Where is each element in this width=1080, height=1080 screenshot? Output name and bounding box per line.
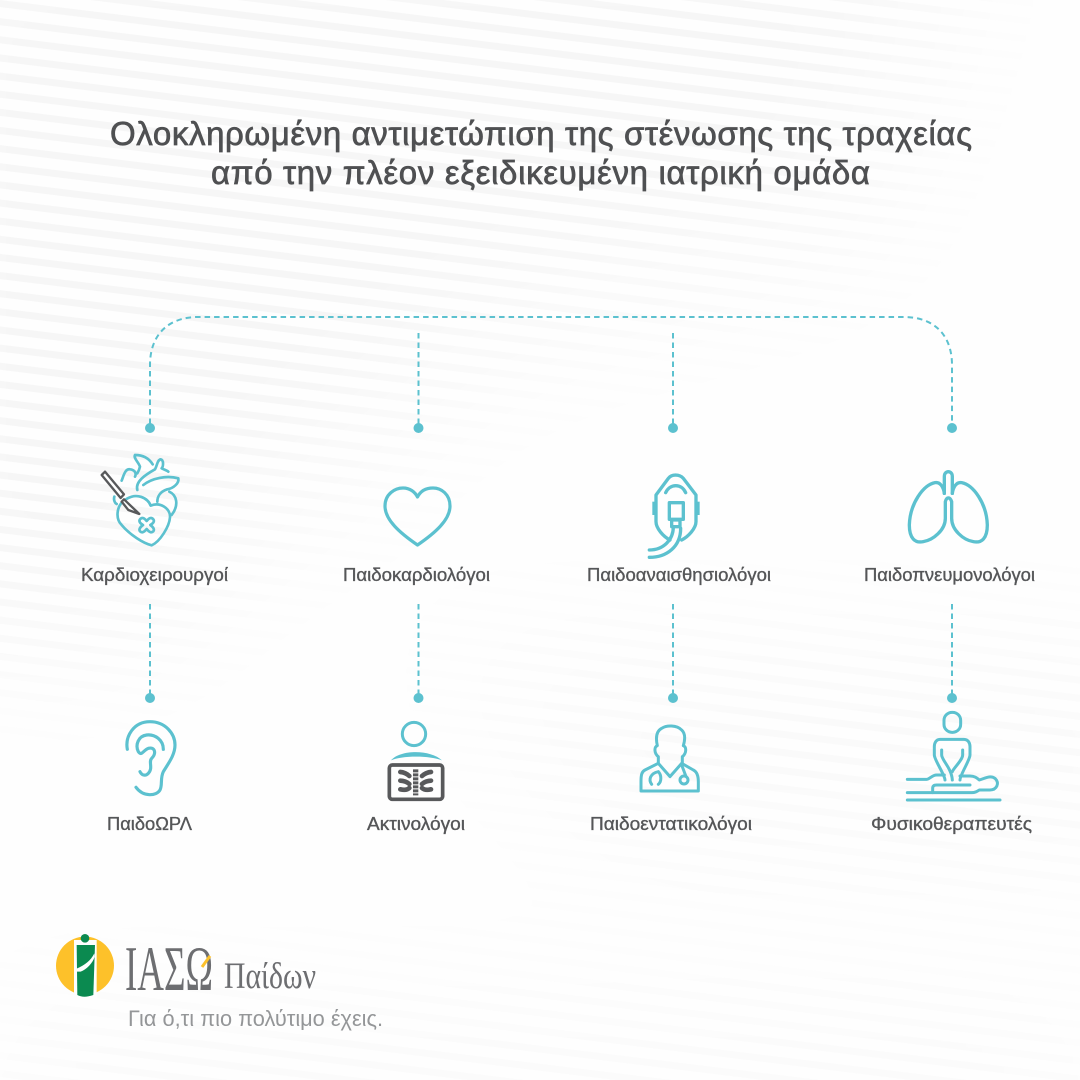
title: από την πλέον εξειδικευμένη ιατρική ομάδα [211,154,870,191]
logo: IASO Paidon [56,934,383,1031]
label: Παιδοαναισθησιολόγοι: Παιδοαναισθησιολόγοι [587,565,771,585]
icon: heart [385,488,450,545]
logo wordmark: ΙΑΣΩ [125,934,213,1004]
title [110,115,972,191]
label: Φυσικοθεραπευτές: Φυσικοθεραπευτές [871,814,1032,834]
label: Παιδοεντατικολόγοι: Παιδοεντατικολόγοι [590,814,752,834]
icon: lungs [909,472,987,542]
logo tagline: Για ό,τι πιο πολύτιμο έχεις. [128,1006,383,1031]
logo mark [56,934,114,998]
label: ΠαιδοΩΡΛ: ΠαιδοΩΡΛ [107,814,192,834]
icon: ear [127,722,175,795]
icon: anatomical heart with scalpel [102,455,178,545]
label: Ακτινολόγοι: Ακτινολόγοι [367,814,465,834]
logo: IASO Paidon: Παίδων [224,956,316,997]
icon: person with chest x-ray [389,722,443,799]
icon: physiotherapist treating patient [907,712,1000,800]
label: Παιδοκαρδιολόγοι: Παιδοκαρδιολόγοι [343,565,490,585]
connector: top bracket [145,317,957,433]
title: Ολοκληρωμένη αντιμετώπιση της στένωσης της τραχείας [110,115,972,152]
icon: oxygen mask [649,475,700,557]
icon: doctor with stethoscope [641,726,698,791]
label: Καρδιοχειρουργοί: Καρδιοχειρουργοί [81,565,228,585]
connector: lower links [145,604,957,703]
label: Παιδοπνευμονολόγοι: Παιδοπνευμονολόγοι [864,565,1035,585]
